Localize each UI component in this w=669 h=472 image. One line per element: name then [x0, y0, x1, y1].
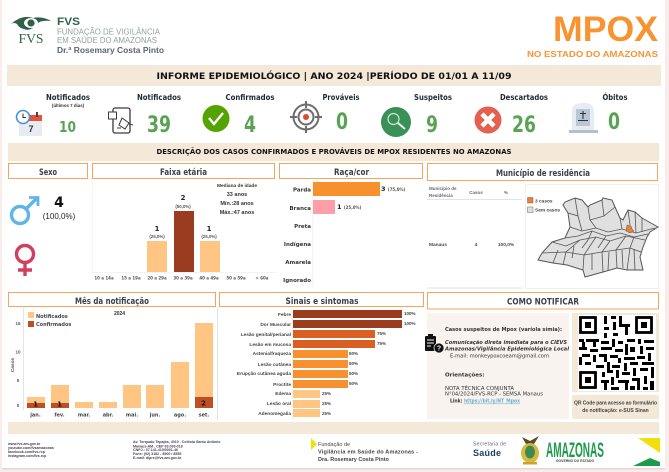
bar chart: sinais e sintomas: 100%	[404, 321, 416, 326]
stat: óbitos: Óbitos	[602, 91, 628, 102]
bar chart: sinais e sintomas: Astenia/fraqueza	[253, 351, 291, 357]
text block: instruções: Comunicação direta imediata para o CIEVS	[445, 340, 567, 346]
stat: suspeitos	[381, 93, 452, 138]
bar chart: mês da notificação: 5	[17, 378, 20, 383]
bar chart: sinais e sintomas: Febre	[278, 312, 291, 318]
bar chart: sinais e sintomas: 25%	[322, 391, 331, 396]
text block: instruções: E-mail: monkeypoxcoeam@gmail.com	[450, 354, 549, 360]
panel: como notificar	[425, 292, 659, 419]
footer: links	[7, 442, 54, 458]
stat: notificados	[108, 93, 181, 138]
text: male count: (100,0%)	[43, 212, 76, 221]
map: Amazonas: Sem casos	[535, 208, 560, 214]
QR code	[572, 313, 659, 392]
text block: instruções: Link: https://bit.ly/NT_Mpox	[450, 398, 520, 404]
footer: secretaria de saúde: Secretaria de	[473, 442, 506, 448]
bar chart: faixa etária: 1	[207, 225, 212, 233]
table: municípios: Casos	[469, 190, 483, 195]
footer: secretaria de saúde	[473, 442, 506, 458]
footer: brasão	[521, 436, 539, 464]
text: mediana de idade	[217, 183, 257, 216]
bar chart: faixa etária: (25,0%)	[201, 234, 217, 239]
heading: sexo: Sexo	[39, 168, 57, 178]
bar chart: sinais e sintomas: Lesão genital/perianal	[241, 332, 291, 338]
legend: mês: Confirmados	[36, 322, 71, 328]
footer: logo fundação	[311, 438, 418, 463]
bar chart: sinais e sintomas: 50%	[349, 371, 358, 376]
stat: notificados: 39	[147, 113, 171, 138]
footer: secretaria de saúde: Saúde	[473, 448, 501, 458]
stat: prováveis: 0	[336, 110, 348, 135]
bar chart: raça/cor	[283, 181, 406, 287]
bar chart: sinais e sintomas: 25%	[322, 411, 331, 416]
footer: logo fundação: Dra. Rosemary Costa Pinto	[318, 457, 390, 463]
bar chart: sinais e sintomas: 75%	[377, 341, 386, 346]
stat: descartados	[474, 93, 548, 138]
footer: logo fundação: Vigilância em Saúde do Amazonas -	[318, 450, 418, 456]
bar chart: faixa etária: 50 a 59a	[226, 276, 246, 280]
bar chart: mês da notificação: mar.	[78, 412, 90, 418]
text: mediana de idade: Mín.:28 anos	[220, 201, 254, 207]
text block: instruções: NOTA TÉCNICA CONJUNTA	[445, 384, 514, 392]
bar chart: faixa etária: 30 a 39a	[173, 276, 193, 280]
stat: notificados: Notificados	[137, 93, 181, 102]
stat: notificados últimos 7 dias: Notificados	[46, 93, 90, 102]
bar chart: sinais e sintomas: 75%	[377, 331, 386, 336]
legend: mês: Notificados	[36, 314, 68, 320]
logo: FVS: FVS	[57, 16, 80, 28]
bar chart: mês da notificação: jan.	[29, 412, 41, 418]
stat: confirmados: 4	[244, 113, 256, 138]
bar chart: faixa etária: (25,0%)	[149, 234, 165, 239]
text: mediana de idade: Mediana de idade	[217, 183, 257, 189]
bar chart: mês da notificação: 2024	[114, 311, 125, 317]
bar chart: mês da notificação: 1	[57, 400, 62, 408]
caption: QR code: de notificação: e-SUS Sinan	[582, 408, 649, 414]
footer: address: Av. Torquato Tapajós, 4010 . Colônia Santo Antônio	[133, 440, 221, 444]
bar chart: mês da notificação: fev.	[54, 412, 65, 418]
heading: município	[428, 164, 658, 180]
table: municípios: Manaus	[429, 242, 447, 248]
heading: faixa etária	[92, 164, 274, 178]
bar chart: sinais e sintomas: 50%	[349, 351, 358, 356]
footer: address: Manaus-AM . CEP 69.093-018	[133, 444, 183, 448]
map: Amazonas: 3 casos	[535, 198, 553, 204]
footer: logo fundação: Fundação de	[318, 442, 350, 448]
caption: QR code	[572, 395, 659, 419]
stat: óbitos	[569, 91, 628, 135]
footer: address: CNPJ.: 07.141.419/0001-46	[133, 448, 178, 452]
text block: instruções: Amazonas/Vigilância Epidemiológica Local	[444, 346, 569, 352]
bar chart: raça/cor: 3 (75,0%)	[381, 185, 406, 193]
bar chart: mês da notificação: 15	[15, 321, 21, 326]
icon: female	[16, 246, 34, 276]
stat: suspeitos: 9	[426, 113, 438, 138]
stat: confirmados	[202, 93, 275, 138]
bar chart: faixa etária: 10 a 14a	[94, 276, 114, 280]
heading: mês da notificação	[8, 292, 216, 307]
heading: município: Município de residência	[496, 168, 590, 179]
heading: raça/cor	[280, 164, 422, 178]
bar chart: raça/cor: Indígena	[284, 241, 311, 248]
bar chart: sinais e sintomas: 50%	[349, 361, 358, 366]
bar chart: faixa etária: 15 a 19a	[121, 276, 141, 280]
heading band: descrição: DESCRIÇÃO DOS CASOS CONFIRMADOS E PROVÁVEIS DE MPOX RESIDENTES NO AMAZONAS	[156, 147, 512, 156]
text: mediana de idade: 33 anos	[227, 192, 247, 198]
stat: notificados últimos 7 dias: 10	[59, 118, 76, 136]
bar chart: raça/cor: Preta	[294, 224, 311, 230]
text: AMAZONAS	[546, 439, 604, 462]
bar chart: faixa etária: 1	[155, 225, 160, 233]
panel: município de residência	[427, 164, 658, 288]
bar chart: sinais e sintomas: 25%	[322, 401, 331, 406]
bar chart: raça/cor: Amarela	[285, 260, 311, 266]
footer: address: Fone: (92) 3182 - 8500 / 8555	[133, 452, 181, 456]
footer: links: facebook.com/fvs.rcp	[8, 450, 46, 454]
logo: FVS: FVS	[18, 32, 44, 47]
text: male count	[43, 195, 76, 221]
heading band: informe	[7, 65, 661, 86]
panel: mês da notificação	[8, 292, 218, 420]
footer: amazonas: GOVERNO DO ESTADO	[556, 459, 594, 463]
bar chart: sinais e sintomas: Erupção cutânea aguda	[237, 371, 291, 377]
heading: como notificar: COMO NOTIFICAR	[507, 298, 579, 308]
heading band: descrição	[8, 143, 659, 161]
panel: sinais e sintomas	[220, 292, 424, 420]
bar chart: mês da notificação: 1	[33, 400, 38, 408]
heading: faixa etária: Faixa etária	[160, 168, 207, 178]
footer: address: E-mail: dipre@fvs.am.gov.br	[133, 456, 182, 460]
stat: descartados: Descartados	[500, 93, 548, 102]
table: municípios: 100,0%	[498, 242, 515, 248]
title: MPOX: NO ESTADO DO AMAZONAS	[527, 49, 658, 59]
title: MPOX: MPOX	[553, 10, 659, 49]
bar chart: mês da notificação: mai.	[126, 412, 138, 418]
footer: amazonas	[546, 439, 604, 463]
heading band: informe: INFORME EPIDEMIOLÓGICO | ANO 2024 |PERÍODO DE 01/01 A 11/09	[156, 70, 512, 82]
footer: links: instagram.com/fvs.rcp	[8, 454, 47, 458]
bar chart: mês da notificação: Casos	[10, 357, 16, 372]
stat: óbitos: 0	[608, 110, 620, 135]
text: mediana de idade: Máx.:47 anos	[220, 210, 254, 216]
bar chart: mês da notificação: jun.	[149, 412, 160, 418]
stat: confirmados: Confirmados	[226, 93, 275, 102]
heading: sinais e sintomas: Sinais e sintomas	[286, 297, 358, 307]
text block: instruções: Orientações:	[445, 372, 485, 378]
bar chart: sinais e sintomas: Lesão em mucosa	[249, 342, 291, 348]
stat: notificados últimos 7 dias: (últimos 7 dias)	[52, 103, 85, 108]
stat: descartados: 26	[512, 113, 536, 138]
bar chart: faixa etária: > 60a	[255, 276, 269, 280]
bar chart: sinais e sintomas	[237, 308, 416, 420]
logo: FVS: FUNDAÇÃO DE VIGILÂNCIA	[57, 28, 161, 36]
caption: QR code: QR Code para acesso ao formulário	[574, 400, 657, 406]
bar chart: faixa etária: 40 a 49a	[199, 276, 219, 280]
bar chart: raça/cor: Parda	[293, 188, 311, 194]
icon: clipboard	[425, 334, 444, 353]
text block: instruções: Casos suspeitos de Mpox (varíola símia):	[445, 326, 562, 333]
heading: como notificar	[428, 292, 658, 309]
bar chart: mês da notificação: 0	[17, 403, 20, 408]
bar chart: sinais e sintomas: Adenomegalia	[258, 411, 291, 417]
footer band	[8, 422, 659, 434]
table: municípios: Município de	[429, 186, 457, 191]
bar chart: sinais e sintomas: 100%	[404, 311, 416, 316]
bar chart: raça/cor: Branca	[289, 206, 311, 212]
bar chart: faixa etária: (50,0%)	[175, 204, 191, 209]
panel: raça/cor	[280, 164, 422, 287]
logo: FVS: Dr.ª Rosemary Costa Pinto	[57, 46, 164, 55]
map: Amazonas	[526, 184, 658, 288]
heading: sinais e sintomas	[220, 292, 424, 307]
bar chart: sinais e sintomas: Lesão cutânea	[258, 362, 291, 368]
table: municípios: Residência	[429, 193, 453, 198]
footer: links: youtube.com/fvsamazonas	[8, 446, 54, 450]
legend: mês	[28, 312, 71, 328]
bar chart: sinais e sintomas: Dor Muscular	[260, 322, 291, 328]
table: municípios: 4	[475, 242, 478, 248]
footer: address	[133, 440, 221, 460]
bar chart: mês da notificação: abr.	[103, 412, 113, 418]
footer: corner shapes	[633, 438, 660, 466]
bar chart: raça/cor: Ignorado	[283, 278, 311, 284]
stat: notificados últimos 7 dias: 7	[28, 124, 34, 134]
bar chart: mês da notificação: 2	[201, 400, 206, 408]
logo: FVS	[11, 16, 164, 55]
text: male count: 4	[54, 195, 64, 211]
bar chart: mês da notificação: 10	[15, 350, 21, 354]
bar chart: sinais e sintomas: 50%	[349, 381, 358, 386]
bar chart: sinais e sintomas: Edema	[275, 391, 291, 397]
bar chart: sinais e sintomas: Lesão oral	[267, 401, 291, 407]
stat: prováveis	[290, 93, 360, 135]
table: municípios	[427, 186, 522, 288]
stat: notificados últimos 7 dias	[16, 93, 90, 136]
text block: instruções: N°04/2024/FVS-RCP - SEMSA Manaus	[445, 392, 543, 398]
stat: prováveis: Prováveis	[322, 93, 360, 102]
stat: suspeitos: Suspeitos	[414, 93, 452, 102]
bar chart: mês da notificação: ago.	[174, 412, 186, 418]
table: municípios: %	[504, 190, 508, 195]
panel: faixa etária	[92, 164, 276, 280]
bar chart: faixa etária	[92, 180, 276, 280]
bar chart: mês da notificação	[10, 308, 218, 420]
footer: links: www.fvs.am.gov.br	[7, 442, 41, 446]
title: MPOX	[527, 10, 659, 59]
heading: mês da notificação: Mês da notificação	[75, 296, 149, 307]
logo: FVS: EM SAÚDE DO AMAZONAS	[57, 36, 157, 45]
bar chart: faixa etária: 2	[181, 194, 186, 202]
bar chart: mês da notificação: set.	[199, 412, 209, 418]
icon: clipboard: ?	[437, 346, 441, 352]
bar chart: faixa etária: 20 a 29a	[147, 276, 167, 280]
bar chart: raça/cor: 1 (25,0%)	[337, 203, 362, 211]
text block: instruções	[427, 313, 569, 419]
heading: raça/cor: Raça/cor	[334, 168, 369, 178]
panel: sexo	[8, 164, 88, 276]
bar chart: sinais e sintomas: Proctite	[273, 382, 291, 388]
icon: male	[12, 198, 38, 224]
